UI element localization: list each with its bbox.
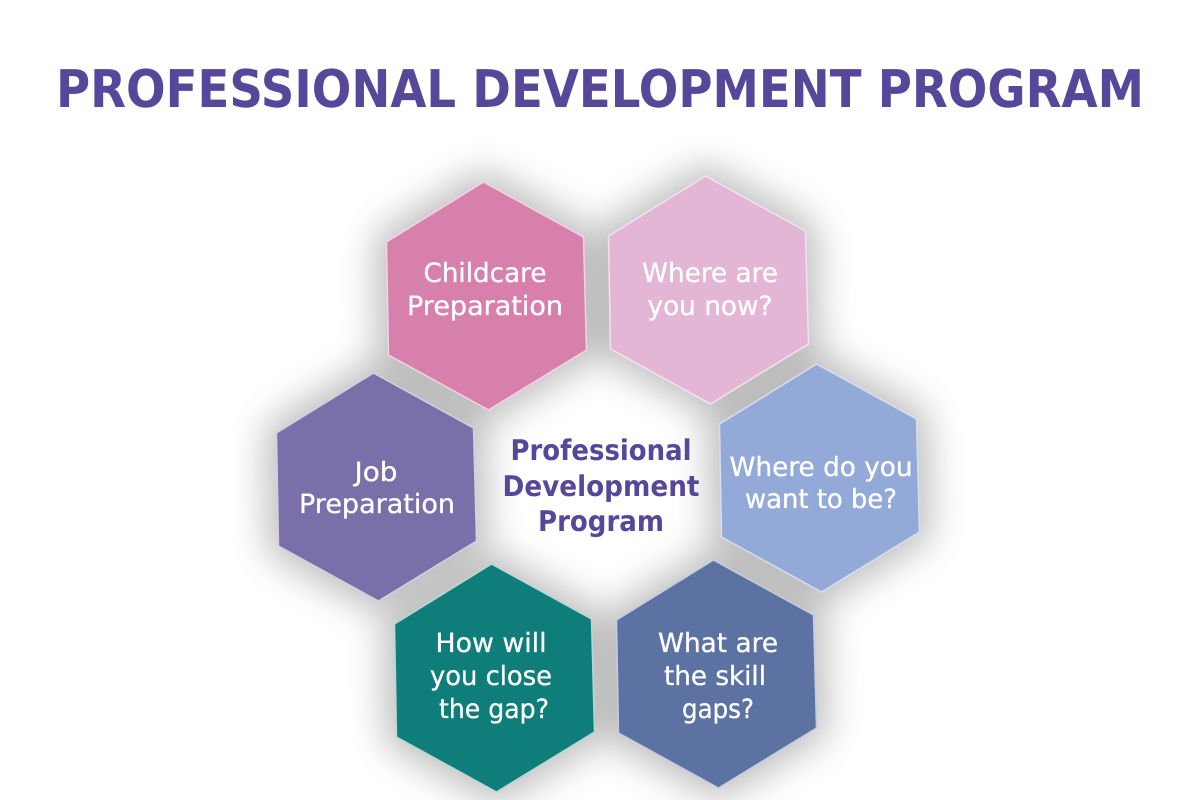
hexagon: Job Preparation: Job [352, 457, 398, 488]
hexagon: Where do you want to be? [720, 364, 920, 592]
hexagon: How will you close the gap?: the gap? [439, 694, 549, 725]
hexagon: Job Preparation [276, 373, 476, 601]
hexagon: Where are you now? [608, 176, 808, 404]
hexagon: Childcare Preparation [386, 182, 586, 410]
center label [502, 434, 700, 538]
hexagon shadows [276, 176, 920, 792]
hexagon: Job Preparation: Preparation [299, 489, 455, 520]
hexagon: How will you close the gap? [394, 564, 594, 792]
hexagon: What are the skill gaps?: gaps? [682, 694, 754, 725]
hexagon: How will you close the gap?: How will [436, 628, 546, 659]
center label: Program [538, 505, 664, 538]
hexagon: Where do you want to be?: want to be? [745, 484, 897, 515]
hexagon: What are the skill gaps?: What are [658, 628, 778, 659]
hexagon: Where do you want to be?: Where do you [730, 452, 912, 483]
hexagon: How will you close the gap?: you close [430, 661, 552, 692]
hexagon: Where are you now?: you now? [648, 291, 772, 322]
center label: Professional [510, 434, 692, 467]
hexagon: Childcare Preparation: Childcare [424, 258, 546, 289]
hexagon: What are the skill gaps?: the skill [664, 661, 766, 692]
hexagon: Where are you now?: Where are [642, 258, 778, 289]
hexagon: What are the skill gaps? [616, 560, 816, 788]
center label: Development [502, 470, 700, 503]
hexagon: Childcare Preparation: Preparation [407, 291, 563, 322]
